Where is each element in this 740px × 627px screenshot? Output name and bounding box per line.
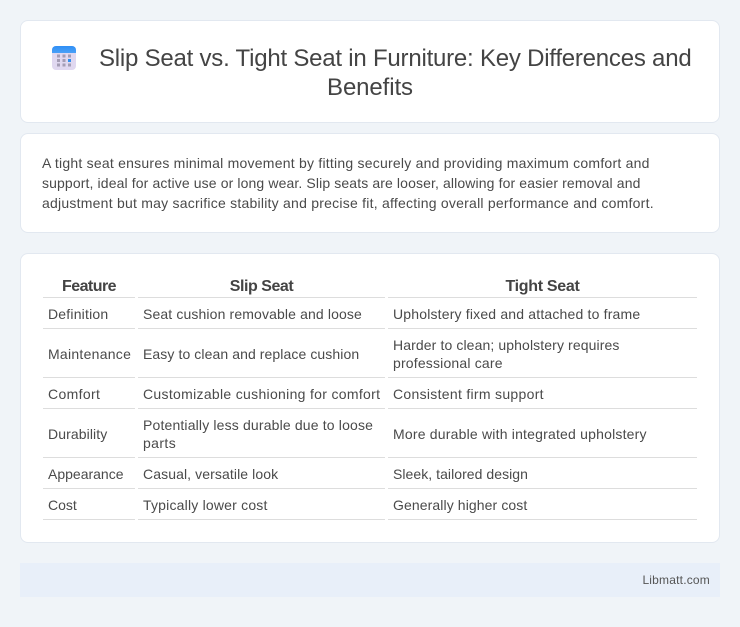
comparison table: Typically lower cost	[143, 497, 268, 513]
title card	[20, 20, 720, 123]
footer bar	[20, 563, 720, 597]
row: Definition: Definition	[48, 306, 108, 322]
comparison table card	[20, 253, 720, 543]
comparison table: Harder to clean; upholstery requires	[393, 337, 620, 353]
title: Benefits	[327, 74, 413, 101]
comparison table: Potentially less durable due to loose	[143, 417, 373, 433]
footer credit: Libmatt.com	[642, 573, 710, 587]
column header: Slip Seat: Slip Seat	[230, 278, 293, 295]
comparison table: Generally higher cost	[393, 497, 527, 513]
row: Comfort: Comfort	[48, 386, 100, 402]
comparison table: Consistent firm support	[393, 386, 544, 402]
title	[99, 45, 691, 101]
comparison table: More durable with integrated upholstery	[393, 426, 647, 442]
row: Cost: Cost	[48, 497, 77, 513]
comparison table: parts	[143, 435, 176, 451]
comparison table: professional care	[393, 355, 503, 371]
comparison table: Sleek, tailored design	[393, 466, 528, 482]
row: Appearance: Appearance	[48, 466, 124, 482]
comparison table: Upholstery fixed and attached to frame	[393, 306, 640, 322]
intro paragraph: support, ideal for active use or long wear. Slip seats are looser, allowing for easier removal and	[42, 175, 641, 191]
row: Maintenance: Maintenance	[48, 346, 131, 362]
column header: Tight Seat: Tight Seat	[505, 278, 580, 295]
title: Slip Seat vs. Tight Seat in Furniture: Key Differences and	[99, 45, 691, 72]
comparison table: Customizable cushioning for comfort	[143, 386, 380, 402]
icon: calendar	[52, 46, 76, 70]
column header: Feature: Feature	[62, 278, 116, 295]
comparison table	[43, 278, 697, 520]
row: Durability: Durability	[48, 426, 107, 442]
comparison table: Easy to clean and replace cushion	[143, 346, 359, 362]
comparison table: Casual, versatile look	[143, 466, 278, 482]
intro text card	[20, 133, 720, 233]
intro paragraph: A tight seat ensures minimal movement by fitting securely and providing maximum comfort and	[42, 155, 650, 171]
intro paragraph: adjustment but may sacrifice stability and precise fit, affecting overall performance and comfort.	[42, 195, 654, 211]
comparison table: Seat cushion removable and loose	[143, 306, 362, 322]
intro paragraph	[42, 155, 654, 211]
